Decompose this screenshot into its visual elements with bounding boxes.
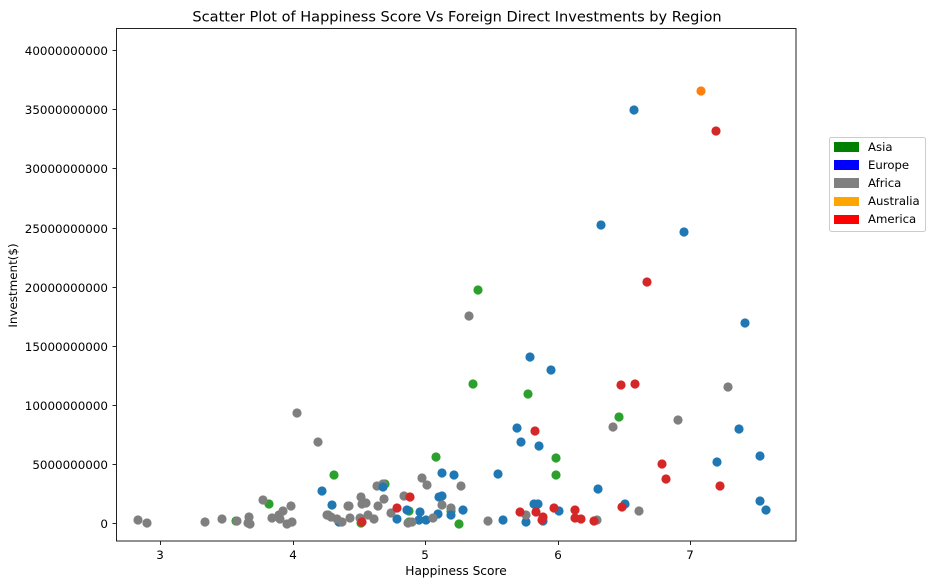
x axis tick labels: 3 xyxy=(156,548,164,562)
legend: Europe: Europe xyxy=(868,158,909,172)
Europe overlapping point xyxy=(378,482,388,492)
y axis tick labels: 5000000000 xyxy=(32,458,108,472)
y axis tick labels: 0 xyxy=(100,517,108,531)
y axis tick labels: 40000000000 xyxy=(25,44,108,58)
legend xyxy=(830,138,926,232)
y axis tick marks xyxy=(112,50,116,524)
y axis tick labels xyxy=(25,44,108,531)
x axis tick labels xyxy=(156,548,694,562)
y axis tick labels: 20000000000 xyxy=(25,281,108,295)
Asia points xyxy=(231,285,624,529)
Australia point xyxy=(696,86,706,96)
Europe points xyxy=(317,105,771,527)
x axis tick marks xyxy=(160,541,690,545)
y axis tick labels: 25000000000 xyxy=(25,222,108,236)
x axis tick labels: 6 xyxy=(554,548,562,562)
Africa points xyxy=(133,311,733,529)
legend: Africa: Africa xyxy=(868,176,901,190)
title: Scatter Plot of Happiness Score Vs Foreign Direct Investments by Region xyxy=(192,8,722,26)
y axis tick labels: 15000000000 xyxy=(25,340,108,354)
legend: America: America xyxy=(868,212,916,226)
scatter plot points xyxy=(133,86,771,529)
plot frame xyxy=(116,28,796,541)
x axis tick labels: 7 xyxy=(686,548,694,562)
Europe overlapping point xyxy=(446,510,456,520)
x axis tick labels: 4 xyxy=(289,548,297,562)
y axis tick labels: 10000000000 xyxy=(25,399,108,413)
x axis tick labels: 5 xyxy=(421,548,429,562)
x axis label: Happiness Score xyxy=(405,564,507,578)
legend: Asia: Asia xyxy=(868,140,892,154)
y axis tick labels: 35000000000 xyxy=(25,103,108,117)
y axis tick labels: 30000000000 xyxy=(25,162,108,176)
legend: Australia: Australia xyxy=(868,194,920,208)
America points xyxy=(357,126,725,527)
y axis label: Investment($) xyxy=(6,243,20,328)
